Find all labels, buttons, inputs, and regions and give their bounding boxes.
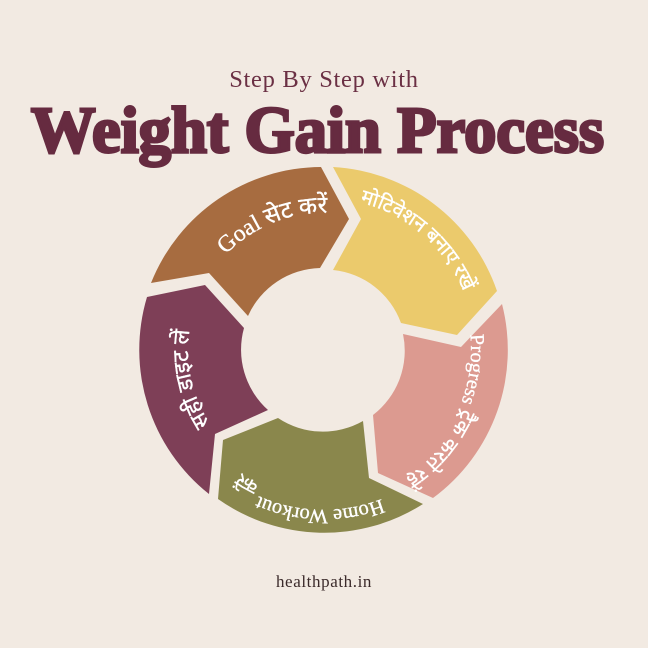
segment: Diet bbox=[139, 285, 268, 494]
segment: Progress bbox=[373, 304, 508, 498]
segment: Home Workout bbox=[218, 418, 423, 533]
segment: Goal: Goal सेट करें bbox=[218, 192, 328, 252]
segment: Progress: Progress bbox=[462, 334, 484, 404]
title: Weight Gain Process bbox=[31, 94, 604, 167]
cycle diagram bbox=[139, 167, 508, 533]
segment: Progress: ट्रैक करते रहें bbox=[406, 408, 479, 492]
subtitle: Step By Step with bbox=[229, 66, 419, 93]
segment: Diet: सही डाइट लें bbox=[168, 328, 208, 431]
segment: Home Workout: Home Workout bbox=[255, 496, 386, 524]
website: healthpath.in bbox=[276, 572, 372, 591]
segment: Motivation: मोटिवेशन बनाए रखें bbox=[362, 188, 480, 290]
segment: Motivation bbox=[333, 167, 497, 335]
segment: Goal bbox=[151, 167, 349, 316]
segment: Home Workout: करें bbox=[232, 473, 257, 494]
